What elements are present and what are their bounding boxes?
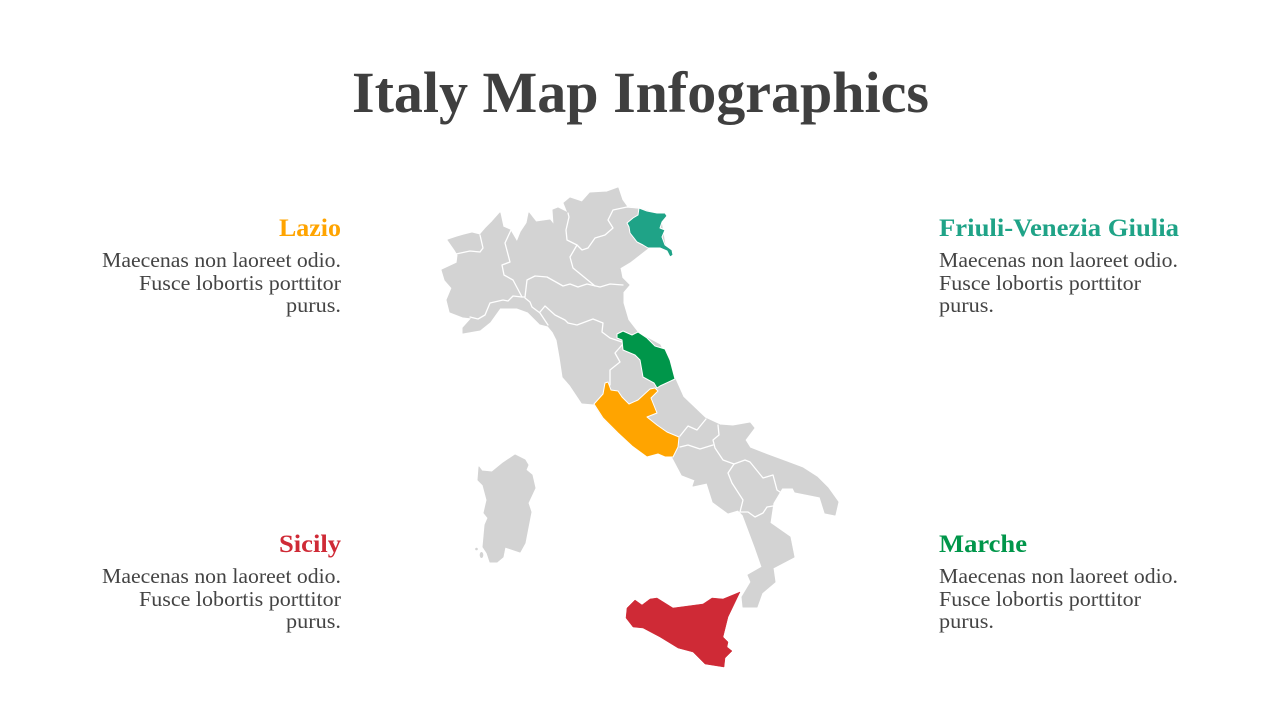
text block: Sicily description: Maecenas non laoreet odio. xyxy=(102,564,341,588)
text block: Sicily description: Fusce lobortis porttitor xyxy=(139,587,341,611)
heading: Sicily: Sicily xyxy=(279,531,342,558)
heading: Marche: Marche xyxy=(939,531,1027,558)
heading: Friuli-Venezia Giulia: Friuli-Venezia Giulia xyxy=(939,215,1180,242)
map: Sardinia xyxy=(478,455,535,562)
text block: Lazio description: purus. xyxy=(286,293,341,317)
text block: Friuli-Venezia Giulia description: purus. xyxy=(939,293,994,317)
heading: Lazio: Lazio xyxy=(279,215,341,242)
panel: Friuli-Venezia Giulia xyxy=(939,215,1180,317)
text block: Friuli-Venezia Giulia description xyxy=(939,248,1178,317)
map region: Lazio xyxy=(594,382,679,457)
text block: Marche description: Maecenas non laoreet odio. xyxy=(939,564,1178,588)
text block: Marche description: Fusce lobortis porttitor xyxy=(939,587,1141,611)
panel: Lazio xyxy=(102,215,341,317)
text block: Marche description xyxy=(939,564,1178,633)
map: region borders xyxy=(456,207,780,517)
map of Italy xyxy=(442,188,838,667)
text block: Friuli-Venezia Giulia description: Fusce lobortis porttitor xyxy=(939,271,1141,295)
map: mainland silhouette xyxy=(442,188,838,607)
text block: Marche description: purus. xyxy=(939,609,994,633)
panel: Marche xyxy=(939,531,1178,633)
text block: Sicily description: purus. xyxy=(286,609,341,633)
map region: Sicily xyxy=(626,592,740,667)
map region: Marche xyxy=(617,331,675,388)
text block: Lazio description: Fusce lobortis porttitor xyxy=(139,271,341,295)
panel: Sicily xyxy=(102,531,342,633)
title: Italy Map Infographics xyxy=(352,60,929,125)
map: small islands xyxy=(475,548,483,558)
text block: Lazio description: Maecenas non laoreet odio. xyxy=(102,248,341,272)
text block: Sicily description xyxy=(102,564,341,633)
text block: Lazio description xyxy=(102,248,341,317)
map region: Friuli-Venezia Giulia xyxy=(627,208,673,257)
text block: Friuli-Venezia Giulia description: Maecenas non laoreet odio. xyxy=(939,248,1178,272)
